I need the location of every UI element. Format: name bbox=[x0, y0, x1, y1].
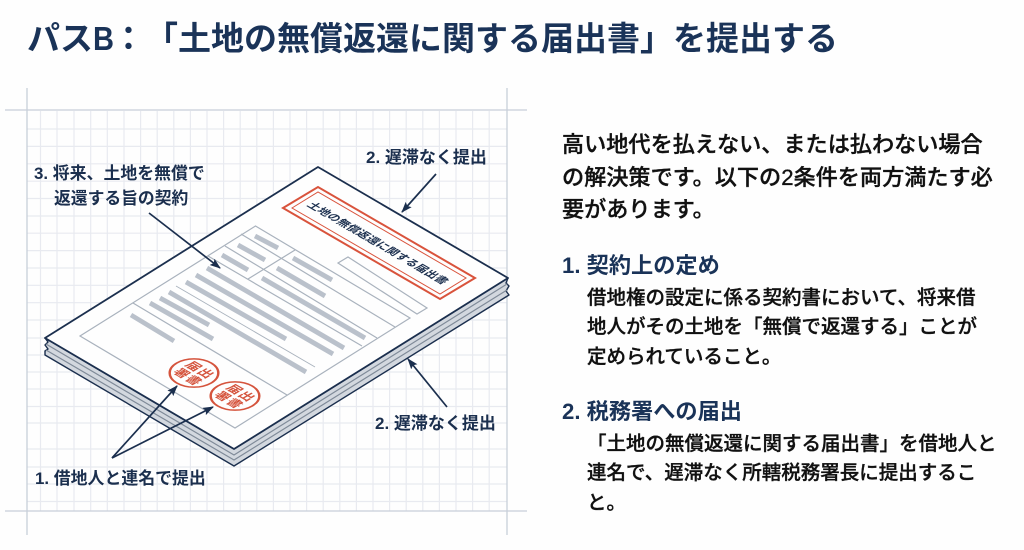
body: condition 2: と。 bbox=[587, 492, 626, 514]
heading: condition 1: 1. 契約上の定め bbox=[562, 253, 720, 278]
arrow: contract bbox=[149, 213, 220, 268]
body: condition 1: 定められていること。 bbox=[587, 346, 781, 368]
body: condition 1 bbox=[587, 287, 977, 368]
intro paragraph: 高い地代を払えない、または払わない場合 bbox=[562, 132, 983, 157]
top sheet bbox=[45, 167, 508, 449]
callout: contract: 返還する旨の契約 bbox=[54, 189, 188, 208]
title: パス ：「土地の無償返還に関する届出書」を提出する bbox=[27, 20, 838, 57]
stamp 1: 届 bbox=[182, 359, 206, 373]
arrow: submit top bbox=[402, 174, 436, 212]
title: B bbox=[93, 20, 114, 57]
stamp 1: 書 bbox=[182, 373, 206, 387]
callout: submit bottom bbox=[375, 359, 496, 433]
red title box bbox=[283, 187, 475, 299]
body: condition 2 bbox=[587, 433, 997, 514]
stamp 2 bbox=[201, 376, 269, 416]
callout: joint names bbox=[35, 386, 213, 488]
callout: joint names: 1. 借地人と連名で提出 bbox=[35, 469, 206, 488]
body: condition 2: 連名で、遅滞なく所轄税務署長に提出するこ bbox=[587, 462, 976, 484]
stamp 2: 署 bbox=[210, 389, 235, 403]
document stack bbox=[45, 167, 509, 466]
stamp 1: 署 bbox=[169, 366, 194, 380]
form frame bbox=[80, 226, 427, 428]
stamp 2: 届 bbox=[223, 382, 247, 396]
blueprint grid bbox=[5, 88, 527, 535]
intro paragraph: の解決策です。以下の2条件を両方満たす必 bbox=[562, 164, 993, 190]
arrows: joint names bbox=[112, 386, 213, 458]
stamp 1: 出 bbox=[194, 366, 218, 380]
body: condition 1: 地人がその土地を「無償で返還する」ことが bbox=[587, 316, 977, 338]
form text bars bbox=[131, 236, 365, 372]
callout: submit top: 2. 遅滞なく提出 bbox=[366, 148, 487, 167]
form title text: 土地の無償返還に関する届出書 bbox=[304, 200, 452, 286]
body: condition 1: 借地権の設定に係る契約書において、将来借 bbox=[587, 287, 975, 309]
callout: contract bbox=[34, 164, 220, 268]
stamp 1 bbox=[160, 353, 228, 393]
arrow: submit bottom bbox=[408, 359, 447, 407]
callout: submit top bbox=[366, 148, 487, 212]
heading: condition 2: 2. 税務署への届出 bbox=[562, 399, 742, 424]
intro paragraph: 要があります。 bbox=[562, 197, 715, 222]
callout: contract: 3. 将来、土地を無償で bbox=[34, 164, 205, 183]
intro paragraph bbox=[562, 132, 993, 222]
stamp 2: 出 bbox=[235, 389, 259, 403]
callout: submit bottom: 2. 遅滞なく提出 bbox=[375, 414, 496, 433]
body: condition 2: 「土地の無償返還に関する届出書」を借地人と bbox=[587, 433, 997, 455]
stamp 2: 書 bbox=[223, 396, 247, 410]
